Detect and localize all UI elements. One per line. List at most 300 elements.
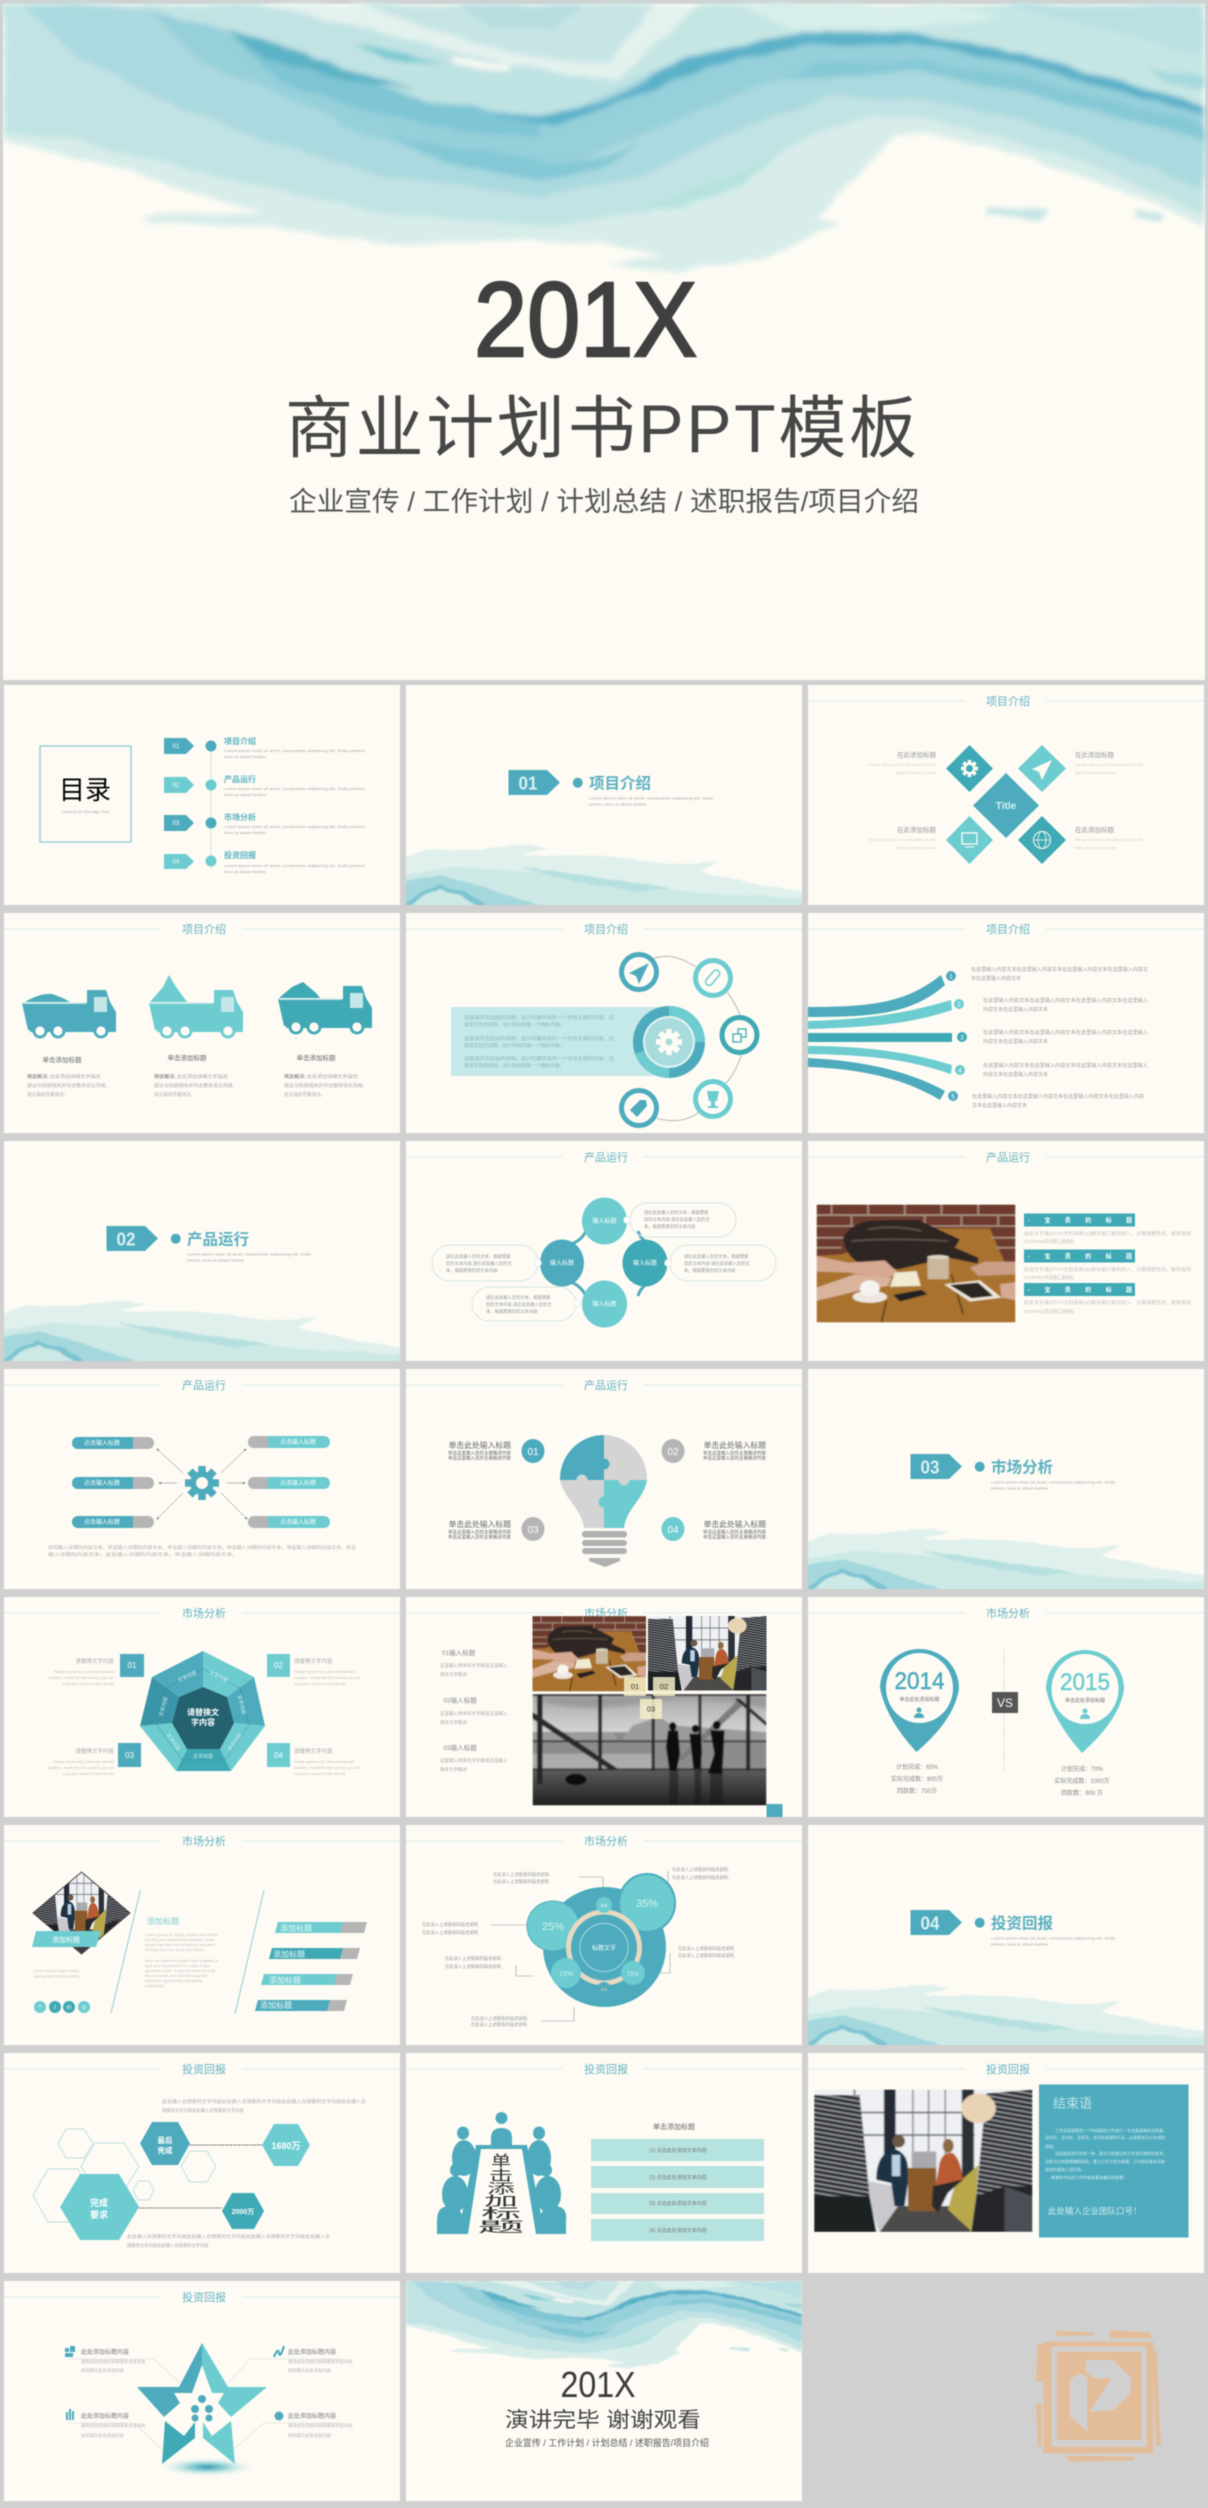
pin 2015: 单击此处添加标题 [1065, 1697, 1105, 1704]
truck captions [27, 1053, 364, 1098]
captions: 单击这里输入您的主要概述内容 [448, 1454, 511, 1462]
middle text: printing and typesetting industry. Lorem [145, 1937, 215, 1942]
number ovals: 01 [527, 1447, 539, 1458]
bubble 25% [527, 1901, 579, 1951]
section title: 项目介绍 [589, 774, 651, 792]
collage captions: 这里输入简单的文字概述这里输入 [440, 1710, 508, 1717]
stream numbers [946, 971, 967, 1101]
cover watercolor wave [4, 4, 1204, 272]
stream descriptions: 在这里输入内容文本在这里输入内容文本在这里输入内容文本在这里输入 [983, 997, 1148, 1004]
collage captions: 03输入标题 [444, 1743, 477, 1752]
number squares: 04 [274, 1751, 283, 1760]
truck captions: 建议与标题相关并符合整体语言风格, [27, 1082, 107, 1089]
middle text: electronic typesetting, remaining [145, 1978, 202, 1983]
bubble 15% right: 15% [627, 1972, 640, 1978]
center gear [185, 1466, 219, 1500]
panel: circular process [406, 913, 802, 1133]
contents timeline: 01 [173, 744, 180, 750]
heptagon diagram: 文字内容 [158, 1696, 170, 1717]
skewed bars [255, 1922, 367, 2011]
labels: Please add your text description to the [1075, 837, 1144, 842]
bottom paragraph: 此处输入合理要的文字内容此处输入合理要的文字内容此处输入合理要的文字内容此处输入合 [127, 2233, 331, 2240]
heading: 投资回报 [182, 2290, 226, 2304]
closing panel: 结束语 [1053, 2096, 1092, 2111]
stream descriptions: 在这里输入内容文本在这里输入内容文本在这里输入内容文本在这里输入 [983, 1062, 1148, 1069]
callout labels: 在此录入上述图表的描述说明, [422, 1929, 479, 1936]
right pills: 点击输入标题 [280, 1438, 316, 1446]
donut [566, 1910, 642, 1986]
bar descriptions [1024, 1230, 1191, 1315]
number squares: 01 [128, 1661, 137, 1670]
bulb base [582, 1531, 627, 1567]
collage captions: 这里输入简单的文字概述这里输入 [440, 1757, 508, 1764]
slanted dividers [111, 1890, 264, 2014]
closing watercolor [406, 2281, 802, 2368]
panel: 2014 vs 2015 [808, 1597, 1204, 1817]
photo 2 [647, 1615, 768, 1692]
list boxes: (1) 点击此处添加文本内容 [649, 2147, 707, 2154]
section description [991, 1936, 1116, 1946]
panel: hexagons [4, 2053, 400, 2273]
section description: Lorem ipsum dolor sit amet, consectetur adipiscing elit. Nulla [991, 1936, 1116, 1940]
text panel: 里填写您的说明。设计的目的是一个精彩内容。 [464, 1042, 565, 1049]
section title: 产品运行 [187, 1230, 249, 1248]
bar descriptions: 此处文字通过TXT文档或者QQ聊天窗口复制进入，无需调整性式，推荐使用 [1024, 1230, 1191, 1237]
contents timeline: lacus ac aliquet facilisis [224, 754, 266, 759]
truck captions: 建议与标题相关并符合整体语言风格, [284, 1082, 364, 1089]
section number tag [508, 770, 560, 795]
paragraph [48, 1544, 357, 1558]
callout labels: 在此录入上述图表的描述说明, [678, 1945, 735, 1952]
heptagon diagram: 文字内容 [226, 1732, 243, 1752]
captions: 请替换文字内容 [294, 1747, 333, 1755]
cover year title: 201X [474, 261, 697, 379]
middle text: dummy text ever since the 1500s, [145, 1947, 205, 1952]
stats 2015: 实际完成数：1000万 [1054, 1777, 1110, 1785]
bubble 15% right [621, 1961, 645, 1985]
collage captions: 简单文字概述 [440, 1719, 467, 1726]
hexagon 2000万 [222, 2193, 264, 2229]
outline hexagons [33, 2129, 216, 2222]
section title: 市场分析 [991, 1458, 1054, 1476]
text panel [451, 1007, 663, 1076]
captions: 单击这里输入您的主要概述内容 [448, 1534, 511, 1540]
bubble texts: 您的文本内容,请在此处输入您的文 [684, 1260, 750, 1267]
captions: Please replace text, click add relevant [294, 1670, 354, 1674]
text panel: 这里填写您自由的说明。设计的最终目的一个符合主题的内容，这 [464, 1035, 614, 1042]
text panel: 这里填写您自由的说明。设计的最终目的一个符合主题的内容，这 [464, 1055, 614, 1062]
section description [991, 1480, 1116, 1490]
panel: star [4, 2281, 400, 2501]
bubble texts: 您的文本内容,请在此处输入您的文 [486, 1301, 552, 1308]
section wave [403, 845, 806, 908]
number ovals: 02 [667, 1447, 679, 1458]
truck captions: 单击添加标题 [42, 1055, 82, 1064]
callout labels [422, 1866, 735, 2028]
callout labels: 在此录入上述图表的描述说明, [678, 1952, 735, 1959]
panel: conference table [406, 2053, 802, 2273]
closing panel: 工作总结就是把一个时间段的工作进行一次全面系统的总检查、 [1055, 2127, 1167, 2133]
collage captions: 02输入标题 [444, 1696, 477, 1704]
bubble 5% bottom [597, 1982, 611, 1996]
section description: Lorem ipsum dolor sit amet, consectetur adipiscing elit. Nulla [589, 796, 714, 800]
donut: 标题文字 [592, 1944, 616, 1952]
collage captions: 简单文字概述 [440, 1766, 467, 1773]
bubble texts: 您的文本内容,请在此处输入您的文 [446, 1260, 512, 1267]
middle text: Lorem Ipsum is simply dummy text of the [145, 1932, 218, 1937]
callout text [81, 2348, 352, 2439]
closing panel: 总结与计划是相辅相成的，要以工作计划为依据，订计划总是在总结 [1045, 2158, 1165, 2164]
heptagon diagram [140, 1651, 265, 1771]
star [137, 2343, 267, 2464]
captions: 单击此处输入标题 [449, 1440, 511, 1450]
section number tag: 04 [920, 1914, 940, 1934]
heading: 项目介绍 [182, 922, 226, 936]
collage captions [440, 1648, 508, 1773]
labels: flying impression plane [895, 770, 937, 775]
captions: copy your content to this directly [294, 1772, 346, 1776]
heptagon diagram: 文字内容 [208, 1669, 229, 1684]
heading: 市场分析 [182, 1834, 226, 1848]
icon circle: paper plane [619, 952, 659, 992]
bubble texts: 本，根据需要您的文本内容 [644, 1223, 696, 1230]
closing panel: 希望你今后的工作中会有更加美好的前景！ [1051, 2174, 1127, 2180]
section wave [805, 1529, 1208, 1592]
section number tag [910, 1910, 962, 1935]
bottom paragraph: 理要的文字内容此处输入合理要的文字内容 [127, 2242, 209, 2249]
stream descriptions: 本在这里输入内容文本 [971, 975, 1021, 982]
table with vertical title: 题 [478, 2219, 524, 2235]
title diamond: Title [996, 801, 1017, 812]
skewed bars: 添加标题 [260, 2000, 292, 2010]
captions: Please replace text, click add relevant [54, 1760, 114, 1764]
bubble 15% left [551, 1958, 581, 1988]
closing year: 201X [560, 2364, 636, 2405]
stream numbers: 3 [960, 1036, 964, 1042]
bottom paragraph [127, 2233, 331, 2249]
middle text: specimen book. It has survived not only [145, 1968, 215, 1973]
contents timeline: 03 [173, 821, 180, 827]
VS badge: VS [997, 1696, 1013, 1710]
table with vertical title: 标 [481, 2206, 521, 2222]
section wave [1, 1301, 404, 1364]
panel: closing slide [406, 2281, 802, 2501]
labels: flying impression plane [1075, 845, 1116, 850]
pin 2015: 2015 [1060, 1669, 1110, 1696]
title bars: - 宝 贵 的 标 题 [1028, 1286, 1132, 1294]
bubble texts: 请在此处输入您的文本，根据需要 [644, 1209, 709, 1216]
contents box: 目录 [59, 775, 111, 805]
callout labels: 在此录入上述图表的描述说明, [493, 1871, 550, 1878]
panel: diamond photo and bars [4, 1825, 400, 2045]
stream descriptions: 在这里输入内容文本在这里输入内容文本在这里输入内容文本在这里输入内容 [972, 1093, 1144, 1100]
oval right [622, 1240, 668, 1286]
labels: Please add your text description to the [868, 762, 937, 767]
oval left [540, 1240, 584, 1286]
callout text: 如何都在此处添加内容 [81, 2367, 125, 2374]
section number tag: 03 [920, 1458, 940, 1478]
captions: headline, modify the text content, you can [48, 1676, 114, 1680]
cover main title: 商业计划书PPT模板 [285, 391, 917, 467]
truck 3 [278, 982, 372, 1034]
table with vertical title: 击 [489, 2168, 513, 2184]
truck captions: 语言描述尽量简洁。 [27, 1091, 68, 1098]
top paragraph: 理要的文字内容此处输入合理要的文字内容 [162, 2107, 244, 2114]
number tags [624, 1677, 675, 1719]
callout labels: 在此录入上述图表的描述说明, [445, 1955, 502, 1962]
contents box: Contents for this page here [61, 809, 110, 814]
labels: Please add your text description to the [868, 837, 937, 842]
heptagon diagram: 字内容 [191, 1717, 215, 1727]
hexagon 最后完成 [140, 2122, 190, 2165]
closing panel: 此处输入企业团队口号！ [1048, 2206, 1142, 2216]
contents timeline: 投资回报 [224, 850, 256, 860]
number ovals: 03 [527, 1525, 539, 1536]
left pills: 点击输入标题 [84, 1439, 120, 1447]
dotted links [124, 2145, 262, 2208]
center gear ring [633, 1006, 705, 1078]
panel: five streams [808, 913, 1204, 1133]
labels: 在此添加标题 [1075, 750, 1114, 759]
middle text: 添加标题 [147, 1916, 179, 1926]
section dot [171, 1234, 181, 1244]
heading: 项目介绍 [584, 922, 628, 936]
heading: 市场分析 [584, 1606, 628, 1620]
captions: copy your content to this directly [63, 1682, 114, 1686]
number ovals: 04 [667, 1525, 679, 1536]
callout text: 此处添加标题内容 [288, 2412, 336, 2420]
contents timeline: 市场分析 [224, 812, 256, 822]
table with vertical title: 添 [487, 2181, 515, 2196]
truck captions: 语言描述尽量简洁。 [284, 1091, 325, 1098]
pin 2014 [880, 1649, 959, 1752]
number tags: 02 [660, 1682, 668, 1691]
stream descriptions: 在这里输入内容文本在这里输入内容文本在这里输入内容文本在这里输入 [983, 1029, 1148, 1036]
closing panel: 经验的基础上进行的。 [1045, 2166, 1085, 2172]
stream 3 [808, 1033, 952, 1042]
captions [48, 1657, 360, 1776]
heading: 投资回报 [986, 2062, 1030, 2076]
photo 3 [532, 1693, 768, 1806]
middle text: five centuries, but also the leap into [145, 1973, 208, 1978]
heading: 投资回报 [584, 2062, 628, 2076]
number squares: 03 [125, 1751, 134, 1760]
captions: 单击这里输入您的主要概述内容 [703, 1450, 766, 1456]
callout leaders [68, 2359, 340, 2451]
list boxes: (4) 点击此处添加文本内容 [649, 2227, 707, 2234]
social icons [34, 2001, 90, 2013]
contents timeline: 04 [173, 860, 180, 866]
left pills [72, 1437, 154, 1528]
hexagon 完成要求 [60, 2174, 139, 2240]
panel: section 03 [805, 1369, 1208, 1592]
stream descriptions [971, 966, 1148, 1109]
section number tag [106, 1226, 158, 1251]
list title: 单击添加标题 [653, 2122, 695, 2131]
pin 2014: 2014 [894, 1668, 944, 1695]
bubble texts [446, 1209, 750, 1315]
truck captions: 单击添加标题 [168, 1053, 207, 1062]
callout labels: 在此录入上述图表的描述说明, [471, 2021, 528, 2028]
right pills: 点击输入标题 [280, 1518, 316, 1526]
oval top [582, 1198, 627, 1244]
heptagon diagram: 文字内容 [165, 1732, 182, 1752]
oval bottom [582, 1280, 627, 1328]
table with vertical title: 单 [491, 2153, 511, 2170]
bubble 35%: 35% [636, 1898, 658, 1910]
oval right: 输入标题 [633, 1259, 657, 1267]
closing panel: 总评价、总分析、总研究，并分析成绩的不足，从而得出引以为戒的 [1045, 2134, 1165, 2140]
callout text: 请用此处添加内容和图表点击添加 [81, 2358, 145, 2365]
heading: 产品运行 [986, 1150, 1030, 1164]
stream numbers: 1 [949, 974, 953, 980]
captions: 单击这里输入您的主要概述内容 [703, 1454, 766, 1462]
section dot [975, 1462, 985, 1472]
number squares: 02 [274, 1661, 283, 1670]
heading: 产品运行 [584, 1378, 628, 1392]
heptagon diagram: 文字内容 [177, 1669, 198, 1684]
paper plane diamond [1018, 745, 1066, 792]
contents timeline [164, 736, 366, 874]
bubble texts: 您的文本内容,请在此处输入您的文 [644, 1216, 710, 1223]
paragraph: 您的输入详细的内容文本。单击输入详细的内容文本。单击输入详细的内容文本。单击输入详细的内容文本。单击输入详细的内容文本。单击 [48, 1544, 357, 1551]
bubble texts: 本，根据需要您的文本内容 [486, 1308, 538, 1315]
bar descriptions: LEOPARD英语图汇版图标 [1024, 1238, 1075, 1245]
labels [868, 750, 1144, 850]
social icons: in [67, 2005, 71, 2011]
captions: 单击此处输入标题 [704, 1519, 766, 1529]
body [543, 1887, 666, 2007]
stream 2 [808, 1000, 952, 1029]
cover subtitle: 企业宣传 / 工作计划 / 计划总结 / 述职报告/项目介绍 [289, 487, 919, 517]
truck captions: 语言描述尽量简洁。 [154, 1091, 195, 1098]
dotted connectors [653, 956, 742, 1121]
bubble texts: 本，根据需要您的文本内容 [684, 1267, 736, 1274]
labels: flying impression plane [1075, 770, 1116, 775]
bar descriptions: 此处文字通过TXT文档或者QQ聊天窗口复制进入，无需调整性式，推荐使用 [1024, 1266, 1191, 1273]
hexagon 最后完成: 最后 [158, 2135, 173, 2145]
stream 5 [808, 1058, 945, 1100]
panel: four ovals [406, 1141, 802, 1361]
oval top: 输入标题 [592, 1217, 617, 1225]
closing subtitle: 企业宣传 / 工作计划 / 计划总结 / 述职报告/项目介绍 [505, 2437, 709, 2448]
text panel: 里填写您的说明。设计的目的是一个精彩内容。 [464, 1062, 565, 1069]
callout text: 请用此处添加内容和图表点击添加 [288, 2358, 352, 2365]
text panel: 里填写您的说明。设计的目的是一个精彩内容。 [464, 1021, 565, 1028]
panel: trucks [4, 913, 400, 1133]
bubble 5% bottom: 5% [601, 1987, 607, 1992]
callout bubbles [432, 1203, 776, 1321]
icon circle: screens [720, 1015, 760, 1055]
callout text: 此处添加标题内容 [81, 2412, 129, 2420]
section number tag: 01 [518, 774, 538, 794]
hexagon 完成要求: 完成 [90, 2197, 108, 2208]
section description: Lorem ipsum dolor sit amet, consectetur adipiscing elit. Nulla [187, 1252, 312, 1256]
truck captions: 建议与标题相关并符合整体语言风格, [154, 1082, 234, 1089]
section wave [805, 1985, 1208, 2048]
star shadow [157, 2457, 257, 2477]
captions: 单击这里输入您的主要概述内容 [703, 1528, 766, 1536]
callout labels: 在此录入上述图表的描述说明, [672, 1866, 729, 1873]
right pills: 点击输入标题 [280, 1479, 316, 1487]
stream numbers: 2 [957, 1002, 961, 1008]
contents timeline: 02 [173, 783, 180, 789]
callout text: 此处添加标题内容 [81, 2348, 129, 2356]
captions: 单击这里输入您的主要概述内容 [448, 1528, 511, 1536]
closing panel [1039, 2084, 1188, 2238]
labels: flying impression plane [895, 845, 937, 850]
divider [1003, 1650, 1005, 1773]
stats 2014: 实际完成数：800万 [891, 1775, 943, 1783]
stream descriptions: 内容文本在这里输入内容文本 [983, 1038, 1048, 1045]
section description [589, 796, 714, 806]
number tags: 03 [647, 1704, 655, 1714]
bar descriptions: 此处文字通过TXT文档或者QQ聊天窗口复制进入，无需调整性式，推荐使用 [1024, 1299, 1191, 1306]
captions: copy your content to this directly [63, 1772, 114, 1776]
truck captions: 用途概况: 此处添加详细文字描述, [154, 1073, 229, 1080]
callout text: 如何都在此处添加内容 [288, 2367, 332, 2374]
stats 2014: 回款数：750万 [897, 1787, 937, 1795]
social icons: f [39, 2005, 41, 2011]
top paragraph: 此处输入合理要的文字内容此处输入合理要的文字内容此处输入合理要的文字内容此处输入合 [162, 2098, 367, 2105]
stream numbers: 5 [951, 1094, 955, 1100]
icon circle: trophy [693, 1079, 733, 1119]
captions: 单击这里输入您的主要概述内容 [703, 1534, 766, 1540]
oval bottom: 输入标题 [592, 1300, 617, 1308]
callout text: 请用此处添加内容和图表点击添加 [288, 2422, 352, 2429]
title bars: - 宝 贵 的 标 题 [1028, 1216, 1132, 1224]
callout labels: 在此录入上述图表的描述说明, [493, 1878, 550, 1885]
captions: 请替换文字内容 [75, 1747, 114, 1755]
callout text: 如何都在此处添加内容 [288, 2432, 332, 2439]
callout labels: 在此录入上述图表的描述说明, [672, 1874, 729, 1881]
panel: contents slide [4, 685, 400, 905]
collage captions: 简单文字概述 [440, 1671, 467, 1678]
contents box [40, 746, 131, 842]
VS badge [992, 1692, 1018, 1713]
diamond label [32, 1931, 101, 1947]
bubble texts: 请在此处输入您的文本，根据需要 [446, 1253, 511, 1260]
truck captions: 用途概况: 此处添加详细文字描述, [284, 1073, 359, 1080]
heptagon diagram: 文字内容 [193, 1753, 213, 1760]
contents timeline: Lorem ipsum dolor sit amet, consectetur adipiscing elit. Nulla pretium, [224, 786, 366, 791]
contents timeline: Lorem ipsum dolor sit amet, consectetur adipiscing elit. Nulla pretium, [224, 748, 366, 753]
list boxes: (3) 点击此处添加文本内容 [649, 2200, 707, 2207]
captions: headline, modify the text content, you can [294, 1676, 360, 1680]
hexagon 1680万 [262, 2124, 310, 2166]
bubble 35% [619, 1874, 675, 1932]
bubble texts: 请在此处输入您的文本，根据需要 [684, 1253, 749, 1260]
labels: Please add your text description to the [1075, 762, 1144, 767]
closing panel: 经验。 [1045, 2143, 1057, 2149]
number tags: 01 [631, 1682, 639, 1691]
stats 2015: 计划完成：70% [1061, 1765, 1104, 1773]
callout labels: 在此录入上述图表的描述说明, [445, 1963, 502, 1970]
labels: 在此添加标题 [897, 825, 936, 834]
left blurb [34, 1968, 79, 1978]
skewed bars: 添加标题 [280, 1923, 312, 1933]
stats 2015: 回款数：900 万 [1061, 1789, 1103, 1797]
icon: stamp logo [1036, 2330, 1161, 2462]
hexagon 2000万: 2000万 [232, 2208, 254, 2216]
middle text: when an unknown printer took a galley of [145, 1958, 219, 1963]
skewed bars: 添加标题 [273, 1949, 305, 1959]
bubble 25%: 25% [542, 1921, 564, 1933]
section description: Lorem ipsum dolor sit amet, consectetur adipiscing elit. Nulla [991, 1480, 1116, 1484]
captions: 单击这里输入您的主要概述内容 [448, 1450, 511, 1456]
stats 2015 [1054, 1765, 1110, 1797]
left pills: 点击输入标题 [84, 1518, 120, 1526]
